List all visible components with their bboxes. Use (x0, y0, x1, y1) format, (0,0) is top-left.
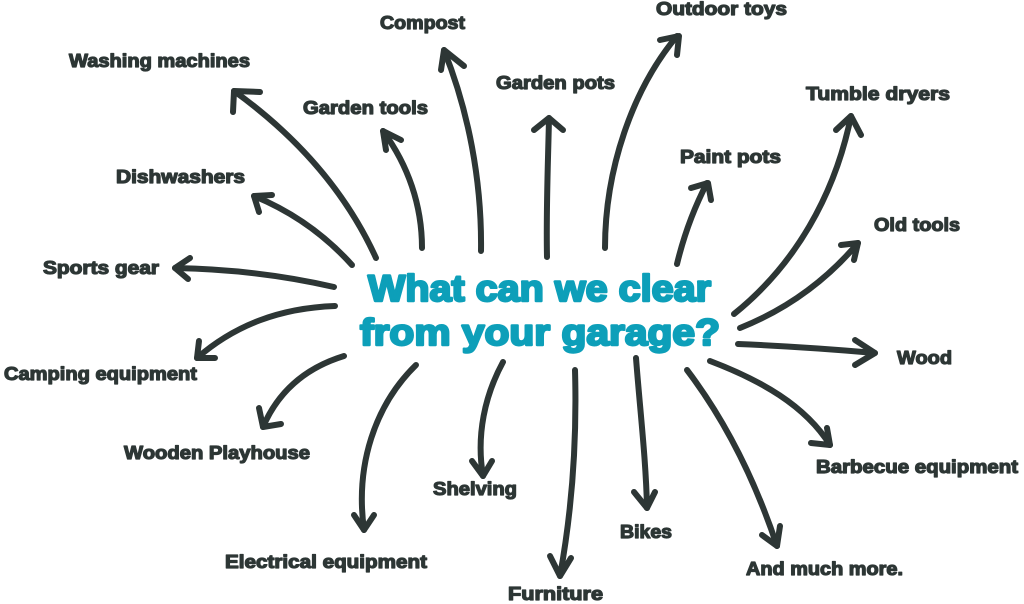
title: from your garage? (360, 312, 720, 353)
arrow to Garden tools (383, 131, 422, 248)
arrow to Washing machines (233, 91, 376, 258)
arrow to Dishwashers (254, 195, 352, 265)
arrow to Camping equipment (197, 306, 335, 358)
arrow to Electrical equipment (354, 365, 416, 530)
label: Compost: Compost (380, 13, 465, 33)
title: What can we clear (368, 268, 711, 309)
label: Sports gear: Sports gear (43, 258, 159, 278)
arrow to Barbecue equipment (710, 361, 830, 445)
title (360, 268, 720, 353)
label: Bikes: Bikes (620, 522, 672, 542)
label: Wood: Wood (897, 348, 952, 368)
label: Garden pots: Garden pots (496, 73, 615, 93)
arrow to And much more. (687, 370, 780, 546)
arrow to Shelving (472, 362, 503, 476)
label: Tumble dryers: Tumble dryers (806, 84, 950, 104)
label: Shelving: Shelving (433, 479, 517, 499)
arrow to Furniture (550, 370, 575, 576)
arrow to Tumble dryers (734, 116, 861, 314)
label: Barbecue equipment: Barbecue equipment (816, 457, 1018, 477)
label: Washing machines: Washing machines (69, 51, 250, 71)
label: Paint pots: Paint pots (680, 147, 781, 167)
label: Electrical equipment: Electrical equipment (225, 552, 427, 572)
arrow to Compost (441, 50, 481, 251)
label: Dishwashers: Dishwashers (116, 167, 245, 187)
label: Camping equipment: Camping equipment (4, 364, 197, 384)
label: Furniture: Furniture (508, 584, 603, 604)
arrow to Bikes (634, 358, 655, 508)
arrow to Garden pots (534, 118, 563, 257)
label: Wooden Playhouse: Wooden Playhouse (124, 443, 310, 463)
label: And much more.: And much more. (746, 559, 903, 579)
arrow to Paint pots (677, 183, 711, 264)
arrow to Sports gear (175, 258, 334, 287)
arrow to Outdoor toys (605, 36, 679, 248)
arrow to Wooden Playhouse (259, 356, 344, 427)
label: Old tools: Old tools (874, 215, 960, 235)
arrow to Old tools (740, 243, 858, 328)
arrow to Wood (738, 340, 875, 365)
label: Garden tools: Garden tools (303, 98, 428, 118)
